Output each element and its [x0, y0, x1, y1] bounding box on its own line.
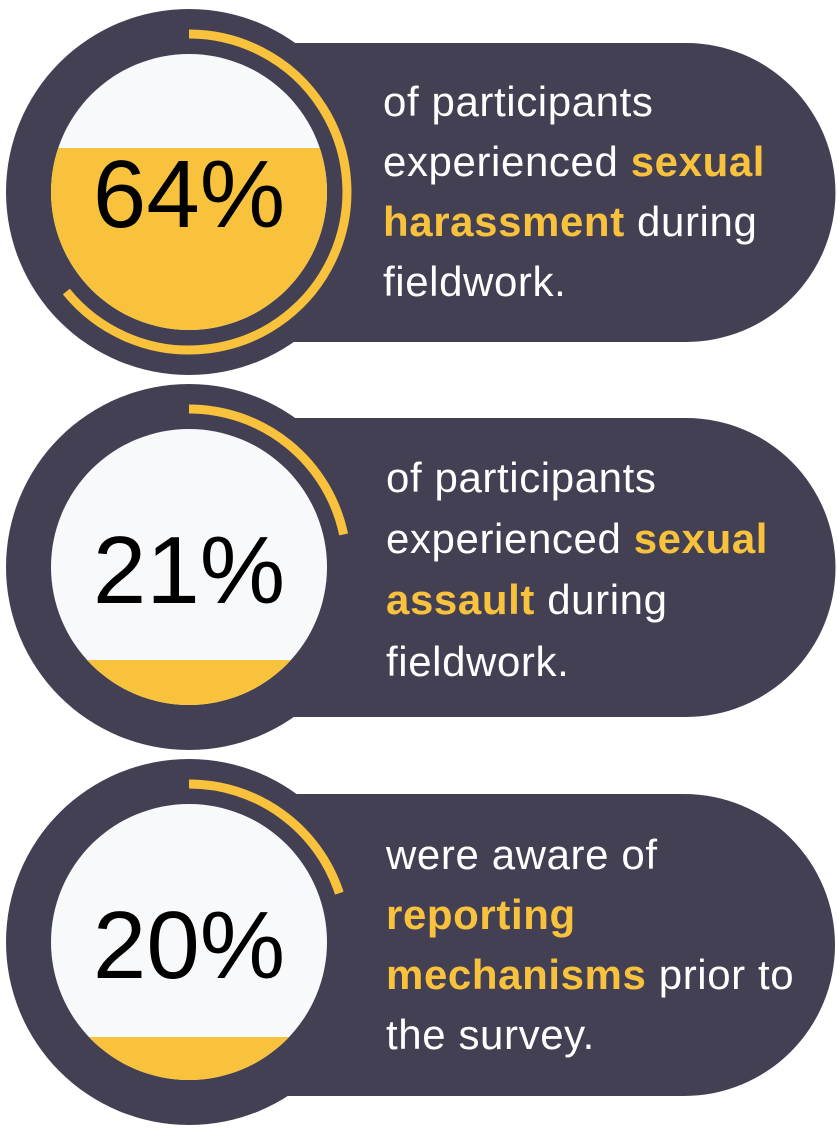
gauge: 64% fill [51, 54, 327, 330]
text block: of participants [383, 78, 653, 125]
number 64%: 64% [93, 141, 285, 248]
text block: experienced sexual [383, 138, 765, 185]
text block: the survey. [386, 1011, 595, 1058]
pill background [189, 794, 835, 1096]
text block: fieldwork. [386, 638, 569, 685]
number 21%: 21% [93, 517, 285, 624]
number 20%: 20% [93, 892, 285, 999]
pill background [189, 43, 835, 342]
text block: assault during [386, 576, 668, 623]
outer circle [6, 9, 372, 375]
text block: experienced sexual [386, 515, 768, 562]
gauge: 21% fill [51, 429, 327, 705]
panel: sexual harassment [6, 9, 835, 375]
text block: fieldwork. [383, 258, 566, 305]
text block: reporting [386, 891, 576, 938]
panel: sexual assault [6, 384, 836, 760]
text block: harassment during [383, 198, 757, 245]
pill background [189, 418, 836, 717]
outer circle [6, 759, 372, 1125]
arc 21% [189, 409, 344, 534]
outer circle [6, 384, 372, 750]
arc 64% [66, 34, 347, 350]
panel: reporting mechanisms [6, 759, 835, 1137]
arc 20% [189, 784, 339, 893]
text block: of participants [386, 454, 656, 501]
gauge: 20% fill [51, 804, 327, 1080]
text block: mechanisms prior to [386, 951, 794, 998]
text block: were aware of [385, 831, 658, 878]
